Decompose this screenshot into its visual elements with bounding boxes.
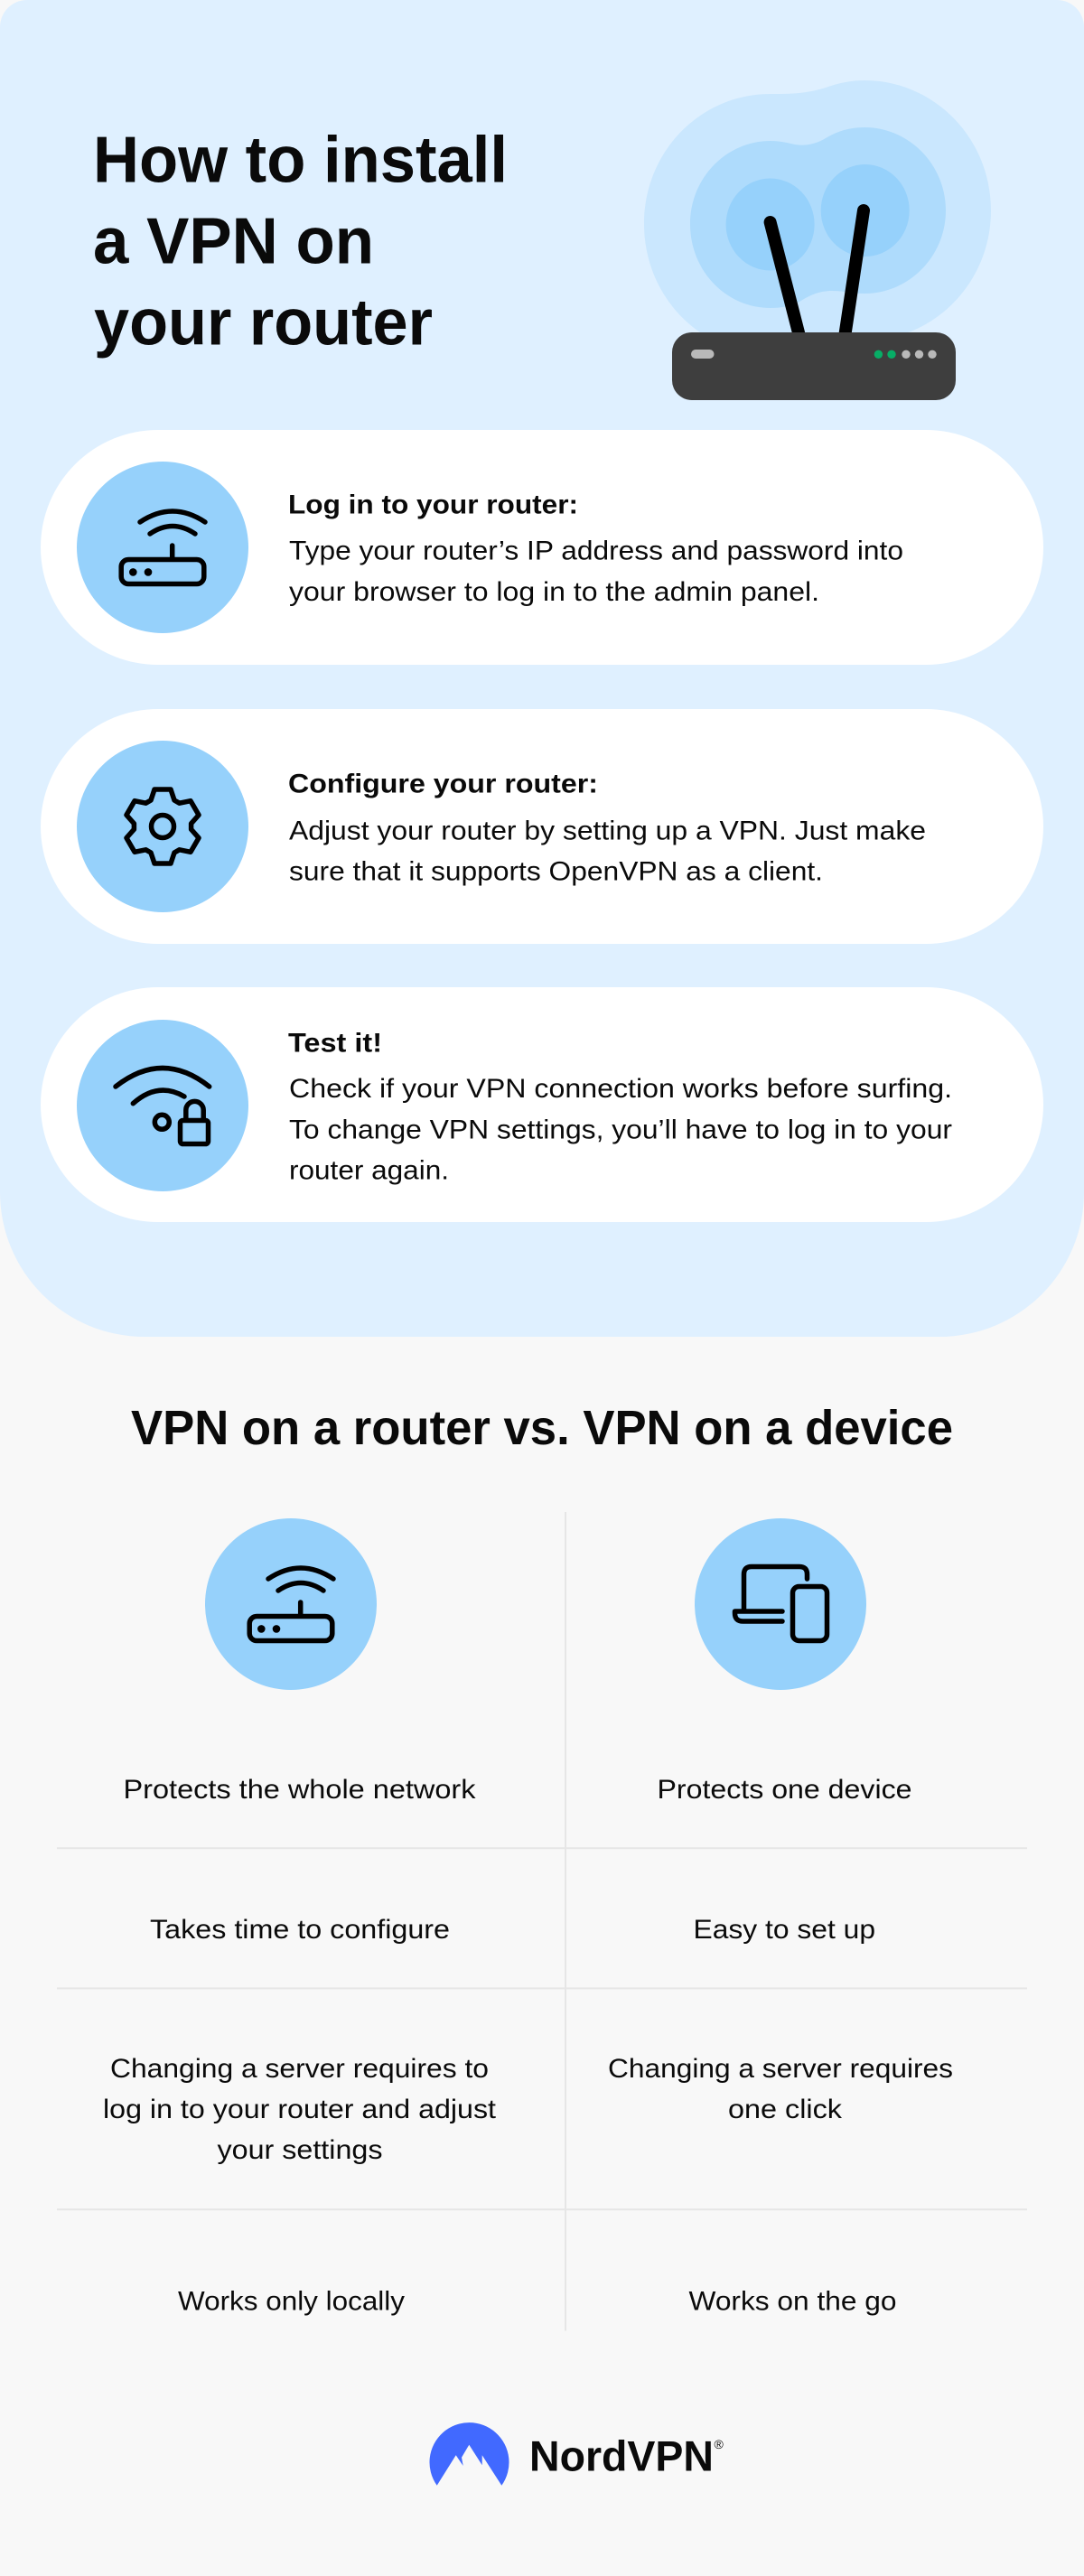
panel: blue header background: [0, 0, 1084, 1337]
column: device comparison text: [608, 1775, 953, 2316]
logo: NordVPN: [430, 2422, 724, 2486]
column: router comparison text: Takes time to configure: [150, 1915, 450, 1945]
step 3 text: To change VPN settings, you’ll have to log in to your: [289, 1115, 952, 1145]
panel: step 2 configure: [41, 709, 1043, 944]
step 1 text: [288, 490, 903, 607]
icon: router: [121, 511, 205, 583]
icon: devices column: [695, 1518, 866, 1690]
icon: router column: [205, 1518, 377, 1690]
title: a VPN on: [93, 206, 374, 278]
step 3 text: Check if your VPN connection works before surfing.: [289, 1074, 952, 1104]
step 1 text: Type your router’s IP address and password into: [289, 536, 903, 565]
column: device comparison text: Works on the go: [688, 2286, 896, 2316]
step 1 text: your browser to log in to the admin panel.: [289, 577, 819, 607]
logo mark: [430, 2422, 509, 2486]
column: device comparison text: Changing a server requires: [608, 2054, 953, 2084]
column: router comparison text: Changing a server requires to: [110, 2054, 489, 2084]
signal waves: [644, 80, 991, 354]
heading: comparison: VPN on a router vs. VPN on a device: [131, 1401, 953, 1455]
title: How to install: [93, 125, 508, 197]
icon: gear: [126, 789, 199, 863]
registered mark: ®: [714, 2437, 724, 2451]
step 3 text: router again.: [289, 1156, 449, 1186]
icon: wifi with lock: [116, 1068, 210, 1143]
panel: step 1 log in: [41, 430, 1043, 665]
step 2 text: sure that it supports OpenVPN as a client.: [289, 856, 823, 886]
logo wordmark: NordVPN: [529, 2432, 714, 2480]
antennas: [771, 210, 864, 343]
step 1 text: Log in to your router:: [288, 490, 578, 519]
panel: step 3 test: [41, 987, 1043, 1222]
step 3 text: [288, 1028, 952, 1186]
column: device comparison text: Easy to set up: [694, 1915, 875, 1945]
title: [93, 125, 508, 359]
column: router comparison text: [103, 1775, 497, 2316]
step 2 text: Adjust your router by setting up a VPN. Just make: [289, 816, 926, 845]
step 2 text: Configure your router:: [288, 769, 598, 798]
title: your router: [94, 287, 433, 359]
column: router comparison text: Works only locally: [178, 2286, 405, 2316]
column: router comparison text: Protects the whole network: [123, 1775, 477, 1805]
column: router comparison text: your settings: [217, 2135, 383, 2165]
column: device comparison text: Protects one device: [658, 1775, 912, 1805]
column: router comparison text: log in to your router and adjust: [103, 2095, 497, 2124]
illustration: router with signal waves: [644, 80, 991, 400]
comparison table grid: [57, 1512, 1027, 2330]
step 3 text: Test it!: [288, 1028, 382, 1058]
step 2 text: [288, 769, 926, 886]
column: device comparison text: one click: [728, 2095, 843, 2124]
router body: [672, 332, 956, 400]
